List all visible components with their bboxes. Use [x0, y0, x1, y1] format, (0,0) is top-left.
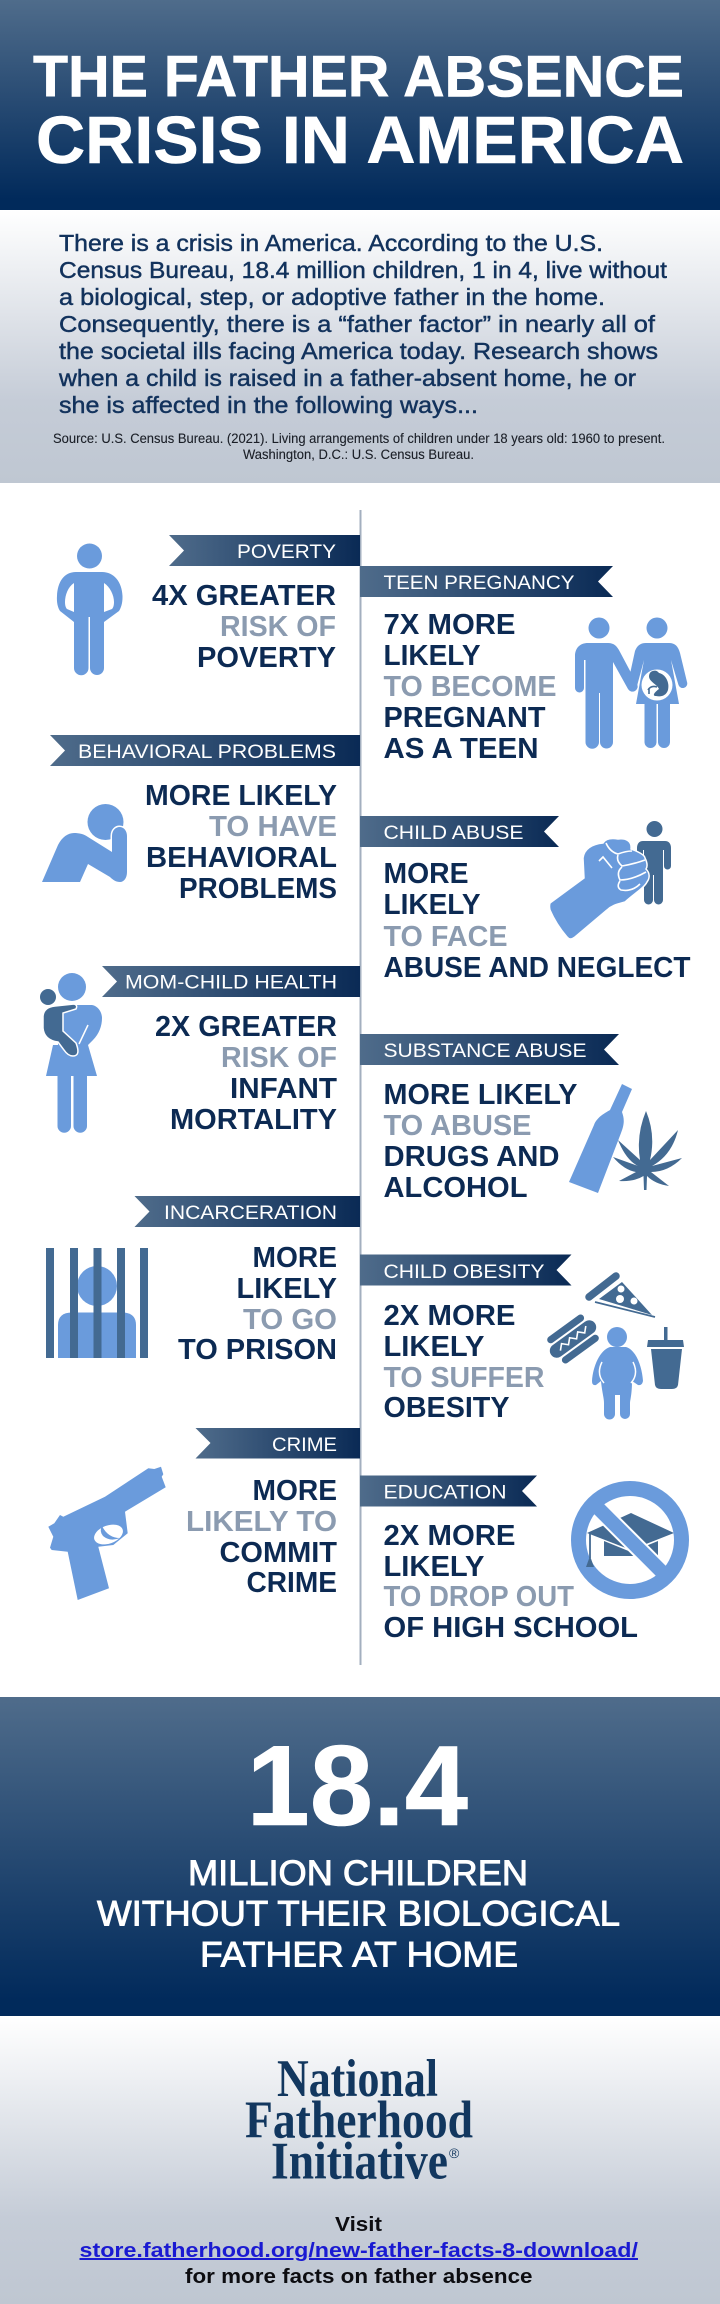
banner: child abuse: [360, 816, 559, 847]
icon: fist threatening child: [550, 821, 671, 939]
source note: Washington, D.C.: U.S. Census Bureau.: [243, 447, 474, 462]
text: crime stat: [186, 1475, 337, 1599]
text: behavioral stat: TO HAVE: [209, 811, 337, 843]
text: obesity stat: [384, 1300, 545, 1424]
text: substance stat: MORE LIKELY: [384, 1079, 578, 1111]
banner: poverty: POVERTY: [237, 542, 336, 563]
banner: child obesity: CHILD OBESITY: [384, 1262, 545, 1283]
call to action: [80, 2214, 639, 2288]
banner: incarceration: INCARCERATION: [164, 1203, 337, 1224]
icon: sitting head-in-hand figure: [42, 804, 127, 882]
panel: poverty: [57, 535, 360, 675]
text: poverty stat: POVERTY: [197, 642, 336, 674]
panel: education: [360, 1476, 682, 1644]
icon: mother holding child: [40, 973, 102, 1133]
banner: incarceration: [134, 1196, 360, 1227]
text: behavioral stat: [145, 780, 337, 905]
panel: crime: [48, 1428, 360, 1600]
text: substance stat: DRUGS AND: [384, 1141, 560, 1173]
title: CRISIS IN AMERICA: [36, 103, 684, 178]
banner: child obesity: [360, 1254, 572, 1286]
title: THE FATHER ABSENCE: [33, 44, 684, 110]
statistic caption: WITHOUT THEIR BIOLOGICAL: [97, 1894, 620, 1934]
text: mom-child stat: RISK OF: [221, 1042, 337, 1074]
banner: teen pregnancy: [360, 566, 613, 597]
text: poverty stat: RISK OF: [220, 611, 336, 643]
text: teen pregnancy stat: LIKELY: [384, 640, 480, 672]
text: crime stat: MORE: [252, 1475, 337, 1507]
text: poverty stat: [152, 580, 336, 674]
banner: education: [360, 1476, 537, 1506]
intro text: Consequently, there is a “father factor” in nearly all of: [59, 311, 656, 337]
title: [33, 44, 684, 178]
source note: Source: U.S. Census Bureau. (2021). Living arrangements of children under 18 years old: 1960 to present.: [53, 431, 665, 446]
icon: handgun: [48, 1467, 166, 1600]
banner: behavioral problems: [50, 735, 360, 766]
text: crime stat: COMMIT: [220, 1537, 337, 1569]
logo: National Fatherhood Initiative: Fatherhood: [245, 2092, 473, 2150]
intro text: she is affected in the following ways...: [59, 392, 478, 418]
icon: overweight child: [592, 1327, 643, 1420]
text: education stat: [384, 1520, 638, 1644]
text: mom-child stat: 2X GREATER: [155, 1011, 337, 1043]
text: poverty stat: 4X GREATER: [152, 580, 336, 612]
icon: no graduation cap: [578, 1488, 682, 1592]
panel: 18.4 million statistic: [0, 1697, 720, 2016]
text: incarceration stat: LIKELY: [236, 1273, 337, 1305]
text: substance stat: TO ABUSE: [384, 1110, 532, 1142]
icon: person behind bars: [46, 1248, 148, 1358]
panel: behavioral problems: [42, 735, 360, 905]
text: behavioral stat: BEHAVIORAL: [146, 842, 337, 874]
panel: child abuse: [360, 816, 691, 984]
intro text: a biological, step, or adoptive father in the home.: [59, 284, 605, 310]
intro text: the societal ills facing America today. Research shows: [59, 338, 658, 364]
statistic caption: FATHER AT HOME: [200, 1936, 518, 1974]
banner: mom-child health: MOM-CHILD HEALTH: [125, 972, 337, 994]
banner: substance abuse: [360, 1034, 619, 1065]
text: child abuse stat: [384, 858, 691, 984]
icon: pizza slice: [589, 1276, 655, 1317]
intro text: when a child is raised in a father-absent home, he or: [58, 365, 636, 391]
text: obesity stat: LIKELY: [384, 1331, 484, 1363]
panel: mom-child health: [40, 966, 360, 1136]
text: child abuse stat: ABUSE AND NEGLECT: [384, 952, 691, 984]
panel: teen pregnancy: [360, 566, 687, 765]
icon: soda cup: [647, 1327, 684, 1389]
text: teen pregnancy stat: AS A TEEN: [384, 733, 538, 765]
text: incarceration stat: TO PRISON: [178, 1334, 337, 1366]
text: behavioral stat: PROBLEMS: [179, 873, 337, 905]
text: incarceration stat: TO GO: [243, 1304, 337, 1336]
banner: crime: [196, 1428, 360, 1458]
text: education stat: LIKELY: [384, 1551, 484, 1583]
text: substance stat: [384, 1079, 578, 1204]
intro text: [58, 230, 668, 418]
text: obesity stat: 2X MORE: [384, 1300, 516, 1332]
text: education stat: OF HIGH SCHOOL: [384, 1612, 638, 1644]
banner: teen pregnancy: TEEN PREGNANCY: [384, 573, 575, 594]
text: crime stat: CRIME: [246, 1567, 337, 1599]
icon: teen couple with pregnant belly: [575, 618, 687, 749]
text: teen pregnancy stat: TO BECOME: [384, 671, 556, 703]
statistic caption: [97, 1854, 620, 1974]
banner: mom-child health: [102, 966, 360, 997]
text: child abuse stat: MORE: [384, 858, 468, 890]
icon: man with empty pockets: [57, 544, 123, 675]
text: crime stat: LIKELY TO: [186, 1506, 337, 1538]
text: behavioral stat: MORE LIKELY: [145, 780, 337, 812]
icon: hot dog: [542, 1310, 604, 1368]
call to action: store.fatherhood.org/new-father-facts-8-download/: [80, 2240, 639, 2262]
text: incarceration stat: [178, 1242, 337, 1366]
call to action: for more facts on father absence: [185, 2266, 532, 2288]
header panel: [0, 0, 720, 210]
logo: National Fatherhood Initiative: ®: [449, 2145, 460, 2161]
text: teen pregnancy stat: [384, 609, 556, 765]
statistic caption: MILLION CHILDREN: [188, 1854, 528, 1893]
text: obesity stat: TO SUFFER: [384, 1362, 545, 1394]
intro text: Census Bureau, 18.4 million children, 1 in 4, live without: [59, 257, 668, 283]
text: mom-child stat: INFANT: [230, 1073, 337, 1105]
text: teen pregnancy stat: 7X MORE: [384, 609, 516, 641]
banner: behavioral problems: BEHAVIORAL PROBLEMS: [78, 742, 336, 763]
text: mom-child stat: MORTALITY: [170, 1104, 337, 1136]
banner: child abuse: CHILD ABUSE: [384, 823, 524, 844]
call to action: Visit: [335, 2214, 382, 2236]
text: teen pregnancy stat: PREGNANT: [384, 702, 546, 734]
text: child abuse stat: TO FACE: [384, 921, 508, 953]
panel: substance abuse: [360, 1034, 682, 1204]
logo: National Fatherhood Initiative: Initiative: [271, 2132, 448, 2190]
text: education stat: 2X MORE: [384, 1520, 516, 1552]
text: mom-child stat: [155, 1011, 337, 1136]
icon: junk food and overweight child: [542, 1276, 684, 1420]
big number: 18.4: [246, 1723, 468, 1850]
banner: crime: CRIME: [272, 1435, 337, 1456]
banner: education: EDUCATION: [384, 1482, 506, 1504]
text: substance stat: ALCOHOL: [384, 1172, 528, 1204]
banner: poverty: [169, 535, 360, 566]
text: child abuse stat: LIKELY: [384, 889, 480, 921]
logo: National Fatherhood Initiative: National: [277, 2050, 438, 2108]
panel: child obesity: [360, 1254, 684, 1424]
panel: incarceration: [46, 1196, 360, 1366]
intro text: There is a crisis in America. According to the U.S.: [59, 230, 603, 256]
icon: bottle and cannabis leaf: [569, 1084, 682, 1193]
text: education stat: TO DROP OUT: [384, 1581, 574, 1613]
text: obesity stat: OBESITY: [384, 1392, 510, 1424]
logo: National Fatherhood Initiative: [245, 2050, 473, 2190]
source note: [53, 431, 665, 462]
intro panel: [0, 210, 720, 483]
panel: footer: [0, 2016, 720, 2304]
text: incarceration stat: MORE: [252, 1242, 337, 1274]
banner: substance abuse: SUBSTANCE ABUSE: [384, 1041, 586, 1062]
